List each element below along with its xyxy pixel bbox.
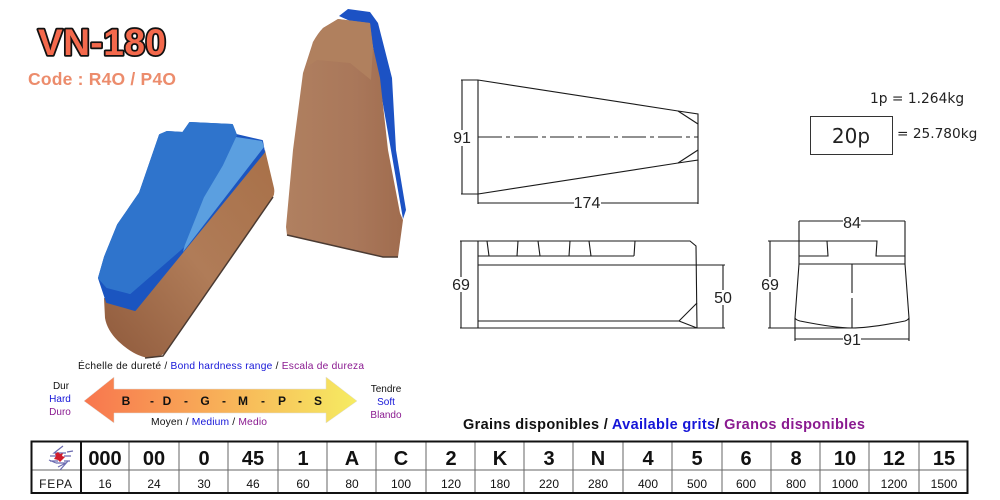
grit codes row: A — [345, 448, 359, 470]
grit codes row: 12 — [883, 448, 905, 470]
grit codes row: N — [591, 448, 605, 470]
blue top face — [99, 123, 236, 293]
FEPA row: 500 — [687, 477, 707, 491]
grit codes row: 00 — [143, 448, 165, 470]
outline — [768, 221, 909, 328]
dimension: length — [478, 160, 698, 204]
dark blue base — [99, 123, 264, 310]
box — [810, 116, 892, 154]
outline — [478, 241, 697, 328]
light blue strip — [183, 137, 264, 252]
center line — [851, 264, 853, 328]
dimension: bottom width — [795, 318, 909, 341]
grit codes row: 000 — [88, 448, 122, 470]
first column divider — [80, 441, 82, 493]
FEPA row: 600 — [736, 477, 756, 491]
FEPA row: 180 — [490, 477, 510, 491]
grit codes row: 10 — [834, 448, 856, 470]
technical drawing: top view — [453, 80, 698, 212]
hardness letters: - — [261, 394, 265, 408]
FEPA row: 1500 — [931, 477, 958, 491]
hardness letters: M — [238, 394, 248, 408]
grit codes row: 8 — [790, 448, 802, 470]
dimension: stone height — [697, 265, 725, 328]
FEPA row: 30 — [197, 477, 211, 491]
FEPA row — [39, 477, 958, 491]
grit codes row: 1 — [297, 448, 309, 470]
dimension text 174: 174 — [574, 195, 600, 212]
hardness letters: G — [200, 394, 210, 408]
FEPA row: FEPA — [39, 477, 73, 491]
dark bottom edge — [287, 235, 398, 257]
grit codes row — [88, 448, 955, 470]
technical drawing: end view — [761, 215, 909, 349]
hardness arrow — [84, 377, 357, 423]
FEPA row: 24 — [147, 477, 161, 491]
hardness letters: B — [122, 394, 131, 408]
soft label: Soft — [377, 397, 395, 408]
grit codes row: 45 — [242, 448, 264, 470]
hard label: Hard — [49, 394, 71, 405]
dimension text 91: 91 — [453, 130, 471, 147]
brown body — [286, 19, 403, 257]
center line — [478, 136, 698, 138]
hardness letters: - — [298, 394, 302, 408]
hardness letters: P — [278, 394, 286, 408]
blue backing — [339, 9, 406, 219]
dimension text 84: 84 — [843, 215, 861, 232]
FEPA row: 1000 — [832, 477, 859, 491]
technical drawing: side view — [452, 241, 732, 328]
grit codes row: 2 — [445, 448, 457, 470]
hard label: Dur — [53, 381, 70, 392]
hardness scale heading: Échelle de dureté / Bond hardness range / Escala de dureza — [78, 359, 364, 372]
FEPA row: 120 — [441, 477, 461, 491]
grits heading: Grains disponibles / Available grits/ Granos disponibles — [463, 417, 865, 433]
hardness letters — [122, 394, 322, 408]
stone dark lower edge — [145, 197, 273, 358]
hardness letters: D — [163, 394, 172, 408]
medium label: Moyen / Medium / Medio — [151, 417, 267, 428]
FEPA row: 800 — [786, 477, 806, 491]
icon: maple leaf logo — [49, 446, 73, 470]
grit codes row: C — [394, 448, 408, 470]
soft label: Tendre — [371, 384, 402, 395]
hardness letters: - — [184, 394, 188, 408]
dimension text 69: 69 — [761, 277, 779, 294]
FEPA row: 220 — [539, 477, 559, 491]
grit codes row: 5 — [691, 448, 703, 470]
grit codes row: 4 — [642, 448, 654, 470]
grit codes row: 0 — [198, 448, 210, 470]
hardness letters: S — [314, 394, 322, 408]
FEPA row: 400 — [638, 477, 658, 491]
stone brown body — [104, 150, 274, 358]
grit codes row: 15 — [933, 448, 955, 470]
grit codes row: K — [493, 448, 508, 470]
chamfers — [678, 111, 698, 163]
photo: stone standing upright — [286, 9, 406, 257]
hard label: Duro — [49, 407, 71, 418]
total weight: = 25.780kg — [897, 126, 977, 142]
soft label: Blando — [370, 410, 402, 421]
dimension: height — [460, 241, 478, 328]
table border — [32, 442, 968, 493]
dimension text 91: 91 — [843, 332, 861, 349]
grit codes row: 6 — [740, 448, 752, 470]
title: VN-180 — [38, 22, 166, 63]
soft label — [370, 384, 402, 421]
dimension: width — [461, 80, 478, 194]
dimension: top width — [799, 220, 905, 222]
FEPA row: 1200 — [881, 477, 908, 491]
grit codes row: 3 — [543, 448, 555, 470]
hard label — [49, 381, 71, 418]
FEPA row: 280 — [588, 477, 608, 491]
photo: stone lying on its side — [99, 123, 274, 358]
outline — [478, 80, 698, 194]
weight per piece: 1p = 1.264kg — [870, 91, 964, 107]
FEPA row: 16 — [98, 477, 112, 491]
dimension: height — [768, 241, 852, 328]
FEPA row: 60 — [296, 477, 310, 491]
dimension text 69: 69 — [452, 277, 470, 294]
hardness letters: - — [150, 394, 154, 408]
FEPA row: 100 — [391, 477, 411, 491]
table grid — [31, 441, 968, 493]
FEPA row: 46 — [246, 477, 260, 491]
box text: 20p — [832, 124, 870, 148]
dimension text 50: 50 — [714, 290, 732, 307]
hardness letters: - — [222, 394, 226, 408]
FEPA row: 80 — [345, 477, 359, 491]
upper facet — [307, 19, 373, 80]
box count — [810, 116, 892, 154]
grit table — [31, 441, 968, 493]
product code: Code : R4O / P4O — [28, 69, 176, 89]
inner lines — [478, 241, 725, 328]
